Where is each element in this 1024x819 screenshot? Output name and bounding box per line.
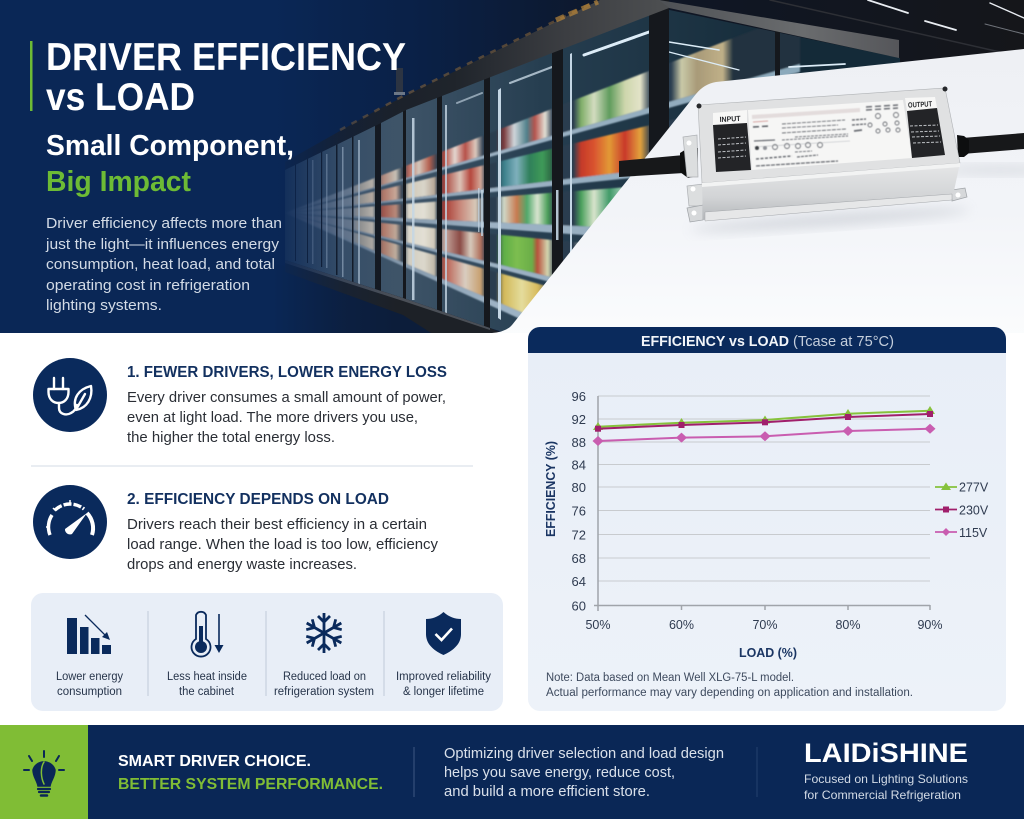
section 2 text	[127, 491, 439, 573]
icon: falling bars	[67, 615, 111, 654]
brand logo and tagline	[804, 738, 968, 802]
series 230V	[595, 411, 933, 432]
y axis labels: 88	[572, 435, 586, 450]
chart title	[641, 334, 894, 350]
subtitle: Small Component,	[46, 130, 294, 162]
y axis labels: 68	[572, 551, 586, 566]
y axis labels	[572, 389, 586, 614]
benefit labels: & longer lifetime	[403, 686, 484, 698]
hero image: refrigerated cabinets	[0, 0, 1024, 333]
icon: plug and leaf	[33, 358, 107, 432]
panel: efficiency chart	[528, 327, 1006, 711]
product image: LED driver	[619, 86, 1024, 236]
driver shadow	[690, 204, 970, 236]
ceiling lights	[770, 0, 1024, 52]
benefit labels: refrigeration system	[274, 686, 374, 698]
panel: benefits	[31, 593, 503, 711]
chart title: (Tcase at 75°C)	[793, 334, 894, 350]
input panel: INPUT	[719, 114, 741, 124]
chart legend: 115V	[959, 526, 988, 540]
footer headline: BETTER SYSTEM PERFORMANCE.	[118, 776, 383, 793]
chart note: Note: Data based on Mean Well XLG-75-L model.	[546, 672, 794, 684]
brand logo and tagline: Focused on Lighting Solutions	[804, 772, 968, 786]
output panel	[905, 97, 945, 158]
output panel: OUTPUT	[908, 99, 933, 110]
intro paragraph: consumption, heat load, and total	[46, 256, 275, 273]
benefit labels: Improved reliability	[396, 671, 491, 683]
section 1 text: the higher the total energy loss.	[127, 430, 335, 446]
line chart: EFFICIENCY (%)	[544, 441, 558, 537]
cabinet base	[292, 266, 499, 333]
intro paragraph: operating cost in refrigeration	[46, 277, 250, 294]
benefit labels	[56, 671, 491, 698]
y axis labels: 72	[572, 528, 586, 542]
benefit labels: Reduced load on	[283, 671, 366, 683]
section 1 text: Every driver consumes a small amount of power,	[127, 390, 446, 406]
y axis labels: 76	[572, 504, 586, 518]
brand logo and tagline: LAIDiSHINE	[804, 738, 968, 768]
left navy fade	[235, 0, 386, 333]
intro paragraph: Driver efficiency affects more than	[46, 215, 282, 232]
footer message: Optimizing driver selection and load design	[444, 746, 724, 762]
benefit labels: Less heat inside	[167, 671, 247, 683]
x axis labels: 70%	[752, 618, 778, 632]
footer message: helps you save energy, reduce cost,	[444, 765, 675, 781]
chart note	[546, 672, 913, 699]
x axis labels: 90%	[917, 618, 943, 632]
chart title: EFFICIENCY vs LOAD	[641, 334, 789, 350]
mounting tabs	[683, 135, 698, 177]
floor	[314, 284, 430, 333]
hanging lamp	[396, 68, 403, 94]
axis titles: LOAD (%)	[739, 645, 797, 660]
driver body	[702, 163, 960, 220]
y axis labels: 64	[572, 574, 586, 589]
section 1 text: 1. FEWER DRIVERS, LOWER ENERGY LOSS	[127, 364, 447, 381]
glass doors	[285, 8, 900, 350]
series 115V	[592, 424, 936, 446]
chart note: Actual performance may vary depending on application and installation.	[546, 687, 913, 699]
intro paragraph	[45, 215, 282, 314]
door frames	[295, 0, 780, 333]
cables	[619, 155, 684, 177]
benefit labels: Lower energy	[56, 671, 123, 683]
section 2 text: 2. EFFICIENCY DEPENDS ON LOAD	[127, 491, 389, 508]
canopy	[285, 0, 669, 170]
footer headline	[118, 753, 383, 793]
icon: thermometer	[191, 612, 224, 657]
x axis labels: 50%	[585, 618, 611, 632]
door edge highlights	[312, 53, 572, 320]
brand logo and tagline: for Commercial Refrigeration	[804, 788, 961, 802]
interior lights	[457, 32, 845, 103]
white diagonal background	[492, 49, 1024, 340]
title: vs LOAD	[46, 76, 195, 119]
icon: shield	[426, 612, 461, 655]
icon: gauge	[33, 485, 107, 559]
section 2 text: load range. When the load is too low, efficiency	[127, 537, 439, 553]
intro paragraph: lighting systems.	[46, 297, 162, 314]
y axis labels: 80	[572, 480, 586, 495]
y axis labels: 84	[572, 458, 586, 472]
benefit labels: consumption	[57, 686, 122, 698]
benefit labels: the cabinet	[179, 686, 235, 698]
icon: light bulb	[24, 751, 64, 796]
chart legend	[935, 480, 989, 540]
y axis labels: 60	[572, 598, 586, 614]
footer message	[444, 746, 724, 800]
title accent bar	[30, 41, 32, 111]
section 2 text: drops and energy waste increases.	[127, 557, 357, 573]
footer banner	[0, 725, 1024, 819]
x axis labels: 80%	[835, 618, 861, 632]
subtitle: Big Impact	[46, 166, 191, 198]
icon: snowflake	[304, 613, 344, 653]
subtitle	[46, 130, 294, 198]
footer message: and build a more efficient store.	[444, 784, 650, 800]
title: DRIVER EFFICIENCY	[46, 36, 406, 79]
x axis labels: 60%	[669, 618, 694, 632]
input panel	[713, 110, 751, 172]
shelves and products	[296, 28, 846, 318]
section 1 text	[127, 364, 447, 446]
section 2 text: Drivers reach their best efficiency in a certain	[127, 517, 427, 533]
section 1 text: even at light load. The more drivers you use,	[127, 410, 418, 426]
x axis labels	[585, 618, 943, 632]
line chart	[544, 389, 989, 660]
chart legend: 230V	[959, 504, 989, 518]
intro paragraph: just the light—it influences energy	[45, 236, 280, 253]
chart legend: 277V	[959, 480, 989, 494]
footer headline: SMART DRIVER CHOICE.	[118, 753, 311, 770]
driver spec label	[748, 100, 912, 170]
y axis labels: 96	[572, 389, 586, 404]
series 277V	[593, 406, 935, 430]
y axis labels: 92	[572, 412, 586, 427]
title	[46, 36, 406, 119]
